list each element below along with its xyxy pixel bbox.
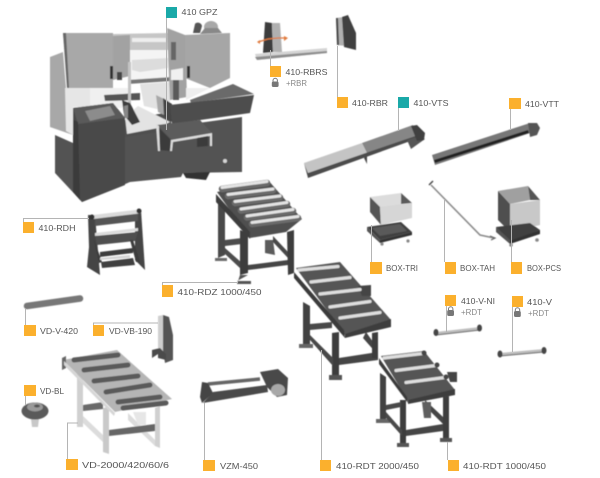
label: 410-V: +RDT [528,308,549,318]
label: 410-RBRS: +RBR [286,78,307,88]
label: VD-2000/420/60/6 [66,423,169,470]
icon: lock [272,78,279,87]
scrap box BOX-PCS [496,186,540,247]
stand 410-RDH [87,208,145,275]
icon: lock [514,308,521,317]
label: 410-RBRS: 410-RBRS [286,67,328,77]
label: 410-V: 410-V [527,297,552,307]
label: 410-RDH [23,218,89,233]
label: VD-VB-190: VD-VB-190 [109,326,152,336]
label: 410-RDZ 1000/450 [162,282,262,297]
label: 410-RDT 1000/450: 410-RDT 1000/450 [463,461,546,471]
tray handle BOX-TAH [429,181,495,240]
label: VZM-450 [203,403,258,471]
label: BOX-TRI: BOX-TRI [386,263,418,273]
label: VD-BL: VD-BL [40,386,64,396]
label: VD-V-420 [24,309,78,336]
ball caster VD-BL [22,402,48,427]
scrap box BOX-TRI [367,193,412,246]
roller table 410-RDZ 1000/450 [215,180,302,284]
label: 410-RDT 2000/450: 410-RDT 2000/450 [336,461,419,471]
roller VD-V-420 [27,298,80,306]
label: 410-V-NI: +RDT [461,307,482,317]
label: VD-VB-190 [93,323,158,336]
conveyor 410-VTS [304,125,425,178]
label: BOX-TAH: BOX-TAH [460,263,495,273]
roller 410-V [498,347,546,358]
icon: lock [447,307,454,316]
label: 410-V-NI [445,295,495,332]
label: 410-RBRS [270,50,328,88]
label: 410-VTT: 410-VTT [525,99,559,109]
label: BOX-PCS [511,220,561,274]
label: 410-RDZ 1000/450: 410-RDZ 1000/450 [178,287,262,297]
label: 410-VTS [398,97,449,131]
roller bar 410-RBR [336,15,356,50]
label: 410-V-NI: 410-V-NI [461,296,495,306]
roller table VD-2000/420/60/6 [62,350,172,454]
label: 410-VTT [509,98,559,130]
roller bar stop 410-RBRS [255,22,327,60]
label: 410-RDT 1000/450 [448,442,546,471]
label: BOX-PCS: BOX-PCS [527,263,561,273]
label: VZM-450: VZM-450 [220,461,258,471]
vertical roller VD-VB-190 [152,315,173,363]
roller table 410-RDT 2000/450 [294,262,391,380]
label: 410-V [512,296,552,352]
label: 410-RBR [337,46,388,108]
label: VD-V-420: VD-V-420 [40,326,78,336]
vise VZM-450 [200,369,288,403]
label: 410-RBR: 410-RBR [352,98,388,108]
band saw machine 410 GPZ [50,21,254,202]
label: 410-VTS: 410-VTS [414,98,449,108]
roller table 410-RDT 1000/450 [376,350,457,447]
label: 410-RDT 2000/450 [320,350,419,471]
label: 410 GPZ [166,7,218,130]
label: 410-RDH: 410-RDH [38,223,76,233]
roller 410-V-NI [434,324,482,336]
label: BOX-TRI [370,225,418,274]
label: BOX-TAH [444,199,495,274]
label: VD-BL [24,385,64,405]
label: 410 GPZ: 410 GPZ [182,7,218,17]
conveyor 410-VTT [432,123,540,165]
label: VD-2000/420/60/6: VD-2000/420/60/6 [82,460,169,470]
